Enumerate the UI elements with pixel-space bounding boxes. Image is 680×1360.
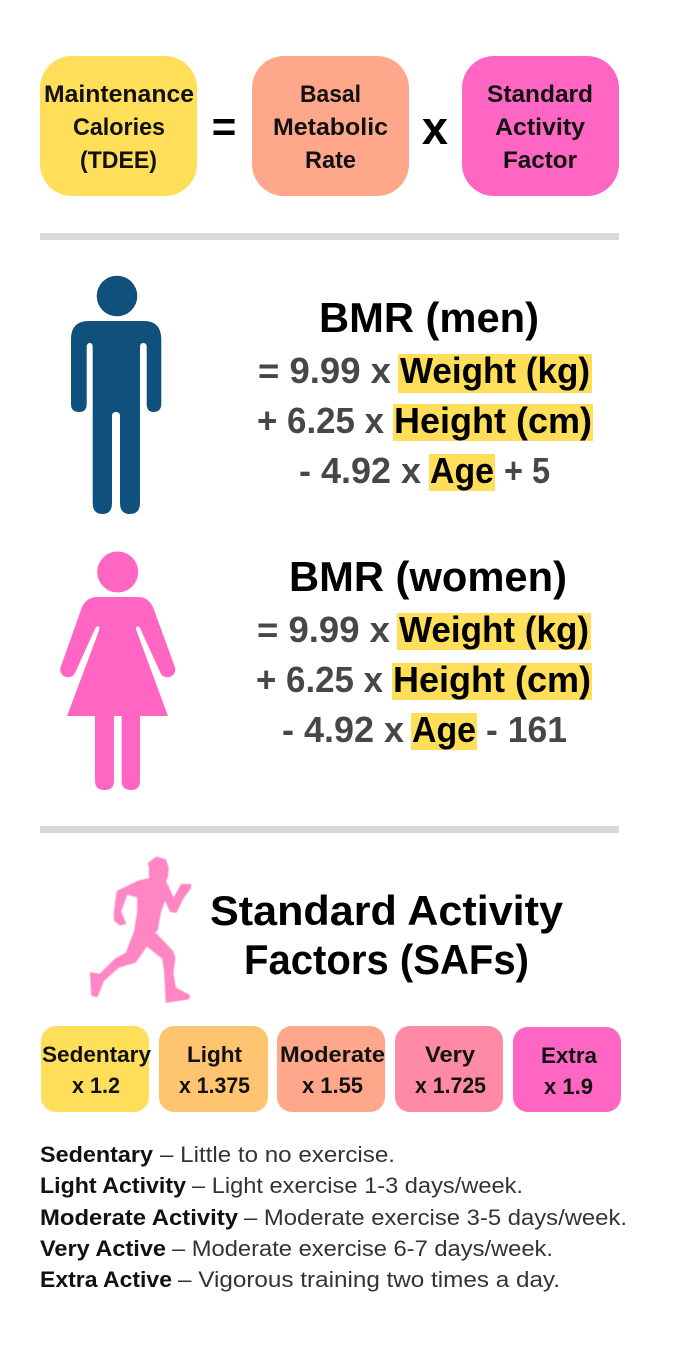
panel: BMR women formula: Age: [412, 709, 476, 750]
panel: BMR women formula: = 9.99 x: [257, 609, 390, 650]
panel: BMR men formula: + 6.25 x: [257, 400, 384, 441]
card: light: x 1.375: [179, 1073, 250, 1098]
card: moderate: Moderate: [280, 1042, 385, 1067]
text block: activity definitions: – Light exercise 1-3 days/week.: [192, 1173, 523, 1198]
panel: BMR women formula: - 4.92 x: [282, 709, 404, 750]
text block: activity definitions: Very Active: [40, 1236, 166, 1261]
panel: BMR men formula: Height (cm): [394, 400, 592, 441]
box: maintenance calories: [40, 56, 197, 196]
card: moderate: [277, 1026, 385, 1112]
card: very: [395, 1026, 503, 1112]
multiply sign: x: [422, 101, 448, 154]
card: light: [159, 1026, 268, 1112]
panel: BMR men formula: = 9.99 x: [258, 350, 391, 391]
box: basal metabolic rate: Metabolic: [273, 114, 388, 141]
text block: activity definitions: – Moderate exercise 3-5 days/week.: [244, 1205, 627, 1230]
box: standard activity factor: Factor: [503, 147, 577, 174]
box: basal metabolic rate: Basal: [300, 81, 361, 108]
icon: running figure: [91, 858, 190, 1002]
card: moderate: x 1.55: [302, 1073, 363, 1098]
text block: activity definitions: Light Activity: [40, 1173, 187, 1198]
heading: BMR men: BMR (men): [319, 294, 539, 341]
card: light: Light: [187, 1042, 243, 1067]
box: maintenance calories: Calories: [73, 114, 165, 141]
panel: BMR women formula: - 161: [486, 709, 567, 750]
equals sign: =: [212, 103, 236, 150]
box: basal metabolic rate: Rate: [305, 147, 356, 174]
text block: activity definitions: Sedentary: [40, 1142, 154, 1167]
text block: activity definitions: [40, 1142, 627, 1292]
panel: BMR women formula: Height (cm): [393, 659, 591, 700]
panel: BMR men formula: Weight (kg): [400, 350, 590, 391]
card: sedentary: x 1.2: [72, 1073, 120, 1098]
box: standard activity factor: [462, 56, 619, 196]
box: standard activity factor: Activity: [495, 114, 586, 141]
box: maintenance calories: Maintenance: [44, 81, 194, 108]
heading: BMR women: BMR (women): [289, 553, 567, 600]
box: standard activity factor: Standard: [487, 81, 593, 108]
text block: activity definitions: – Vigorous training two times a day.: [178, 1267, 560, 1292]
panel: BMR men formula: - 4.92 x: [299, 450, 421, 491]
text block: activity definitions: – Moderate exercise 6-7 days/week.: [172, 1236, 553, 1261]
card: extra: x 1.9: [544, 1074, 593, 1099]
text block: activity definitions: – Little to no exercise.: [160, 1142, 395, 1167]
card: very: Very: [425, 1042, 476, 1067]
panel: BMR women formula: [256, 553, 592, 750]
panel: BMR men formula: [257, 294, 593, 491]
card: extra: [513, 1027, 621, 1112]
card: sedentary: Sedentary: [42, 1042, 152, 1067]
box: basal metabolic rate: [252, 56, 409, 196]
heading: standard activity factors: [210, 887, 564, 983]
heading: standard activity factors: Factors (SAFs): [244, 936, 529, 983]
panel: BMR women formula: + 6.25 x: [256, 659, 383, 700]
text block: activity definitions: Extra Active: [40, 1267, 172, 1292]
box: maintenance calories: (TDEE): [80, 147, 157, 174]
panel: activity factor cards: [41, 1026, 621, 1112]
card: extra: Extra: [541, 1043, 598, 1068]
text block: activity definitions: Moderate Activity: [40, 1205, 239, 1230]
heading: standard activity factors: Standard Activity: [210, 887, 564, 934]
icon: woman figure: [60, 552, 175, 790]
panel: BMR women formula: Weight (kg): [399, 609, 589, 650]
card: sedentary: [41, 1026, 152, 1112]
icon: man figure: [71, 276, 161, 514]
card: very: x 1.725: [415, 1073, 486, 1098]
panel: BMR men formula: Age: [430, 450, 494, 491]
panel: TDEE equation: [40, 56, 619, 196]
panel: BMR men formula: + 5: [504, 450, 550, 491]
